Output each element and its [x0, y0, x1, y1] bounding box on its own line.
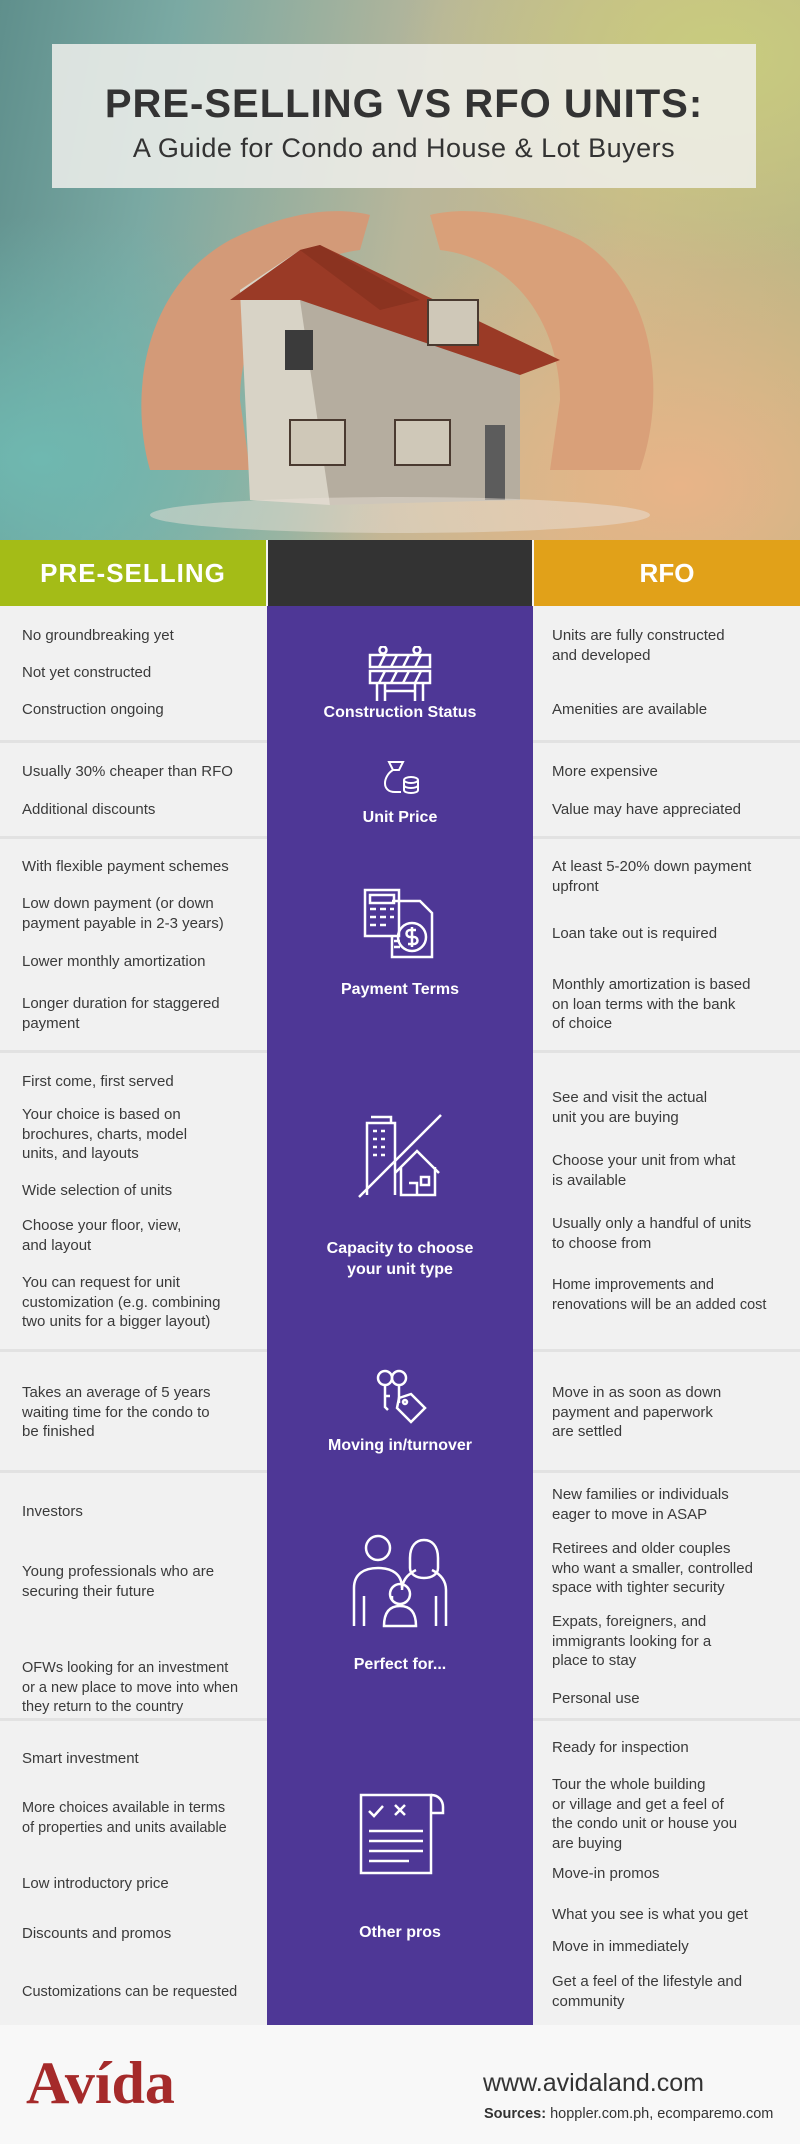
- text: Perfect for...: [354, 1656, 446, 1673]
- text: Not yet constructed: [22, 664, 151, 681]
- text: securing their future: [22, 1582, 155, 1600]
- text: on loan terms with the bank: [552, 996, 735, 1012]
- text: to choose from: [552, 1234, 651, 1252]
- row: unit price: [0, 743, 800, 839]
- text: Choose your floor, view,: [22, 1217, 181, 1234]
- text: Expats, foreigners, and: [552, 1613, 706, 1630]
- text: waiting time for the condo to: [22, 1404, 210, 1420]
- text: Amenities are available: [552, 701, 707, 718]
- text: Construction Status: [324, 704, 476, 721]
- text: space with tighter security: [552, 1579, 725, 1596]
- header: RFO: RFO: [640, 558, 694, 588]
- text: First come, first served: [22, 1073, 174, 1090]
- text: Moving in/turnover: [328, 1437, 472, 1454]
- text: Move in immediately: [552, 1938, 689, 1955]
- header photo: [0, 0, 800, 540]
- text: More expensive: [552, 763, 658, 780]
- row: payment terms: [0, 839, 800, 1053]
- text: What you see is what you get: [552, 1906, 748, 1923]
- text: eager to move in ASAP: [552, 1506, 707, 1522]
- row: construction status: [0, 606, 800, 743]
- text: OFWs looking for an investment: [22, 1660, 228, 1676]
- text: payment: [22, 1014, 80, 1032]
- text: Other pros: [359, 1924, 441, 1941]
- header: pre-selling: [0, 540, 266, 606]
- header: RFO: [534, 540, 800, 606]
- header: pre-selling: PRE-SELLING: [40, 558, 226, 588]
- text: Tour the whole building: [552, 1776, 705, 1793]
- text: community: [552, 1992, 625, 2010]
- icon: calculator and document: [364, 888, 434, 958]
- text: units, and layouts: [22, 1145, 139, 1162]
- text: Move-in promos: [552, 1865, 660, 1882]
- text: With flexible payment schemes: [22, 858, 229, 875]
- text: Longer duration for staggered: [22, 995, 220, 1012]
- footer: [0, 2025, 800, 2144]
- text: of properties and units available: [22, 1820, 227, 1836]
- text: Investors: [22, 1503, 83, 1520]
- icon: buildings: [358, 1114, 442, 1198]
- text: Smart investment: [22, 1750, 139, 1767]
- text: New families or individuals: [552, 1486, 729, 1503]
- text: payment and paperwork: [552, 1404, 713, 1420]
- row: moving in: [0, 1352, 800, 1473]
- text: Capacity to choose: [327, 1240, 473, 1257]
- text: Payment Terms: [341, 981, 459, 998]
- subtitle: A Guide for Condo and House & Lot Buyers: [133, 133, 675, 163]
- icon: money bag: [384, 761, 419, 794]
- website: www.avidaland.com: [483, 2069, 704, 2097]
- text: Usually 30% cheaper than RFO: [22, 763, 233, 780]
- text: who want a smaller, controlled: [552, 1560, 753, 1576]
- text: immigrants looking for a: [552, 1632, 711, 1650]
- title: PRE-SELLING VS RFO UNITS:: [105, 82, 703, 126]
- text: payment payable in 2-3 years): [22, 914, 224, 932]
- text: the condo unit or house you: [552, 1815, 737, 1832]
- text: or village and get a feel of: [552, 1796, 724, 1812]
- text: See and visit the actual: [552, 1089, 707, 1106]
- text: they return to the country: [22, 1699, 183, 1715]
- text: upfront: [552, 878, 599, 894]
- icon: keys with tag: [376, 1370, 427, 1424]
- text: Unit Price: [363, 809, 437, 826]
- text: Personal use: [552, 1690, 640, 1707]
- text: Home improvements and: [552, 1277, 714, 1293]
- text: is available: [552, 1172, 626, 1188]
- logo: Avida: Avída: [26, 2050, 175, 2116]
- title box: [52, 44, 756, 188]
- icon: family: [352, 1534, 448, 1628]
- text: Loan take out is required: [552, 925, 717, 942]
- icon: barricade: [368, 646, 432, 701]
- text: Choose your unit from what: [552, 1152, 735, 1169]
- row: perfect for: [0, 1473, 800, 1721]
- text: Retirees and older couples: [552, 1540, 730, 1557]
- text: Discounts and promos: [22, 1925, 171, 1942]
- column headers: [0, 540, 800, 606]
- text: Customizations can be requested: [22, 1984, 237, 2000]
- text: two units for a bigger layout): [22, 1313, 210, 1330]
- header: middle: [268, 540, 532, 606]
- text: Young professionals who are: [22, 1563, 214, 1580]
- text: Low introductory price: [22, 1875, 169, 1892]
- text: Construction ongoing: [22, 701, 164, 718]
- text: your unit type: [347, 1261, 453, 1278]
- text: Lower monthly amortization: [22, 953, 205, 970]
- text: More choices available in terms: [22, 1800, 225, 1816]
- text: No groundbreaking yet: [22, 627, 174, 644]
- text: Low down payment (or down: [22, 895, 214, 912]
- text: of choice: [552, 1015, 612, 1032]
- text: Usually only a handful of units: [552, 1215, 751, 1232]
- text: unit you are buying: [552, 1108, 679, 1126]
- row: capacity to choose: [0, 1053, 800, 1352]
- text: be finished: [22, 1423, 95, 1440]
- row: other pros: [0, 1721, 800, 2025]
- text: or a new place to move into when: [22, 1680, 238, 1696]
- text: Value may have appreciated: [552, 801, 741, 818]
- sources: Sources: hoppler.com.ph, ecomparemo.com: [484, 2106, 773, 2122]
- text: Units are fully constructed: [552, 627, 725, 644]
- icon: checklist document: [360, 1794, 444, 1874]
- text: brochures, charts, model: [22, 1126, 187, 1142]
- text: Wide selection of units: [22, 1182, 172, 1199]
- text: You can request for unit: [22, 1274, 180, 1291]
- text: are buying: [552, 1834, 622, 1852]
- text: Your choice is based on: [22, 1106, 181, 1123]
- text: Monthly amortization is based: [552, 976, 750, 993]
- text: Takes an average of 5 years: [22, 1384, 210, 1401]
- text: and layout: [22, 1236, 91, 1254]
- text: customization (e.g. combining: [22, 1294, 220, 1310]
- text: Move in as soon as down: [552, 1384, 721, 1401]
- text: renovations will be an added cost: [552, 1296, 766, 1312]
- text: are settled: [552, 1423, 622, 1440]
- text: At least 5-20% down payment: [552, 858, 751, 875]
- text: Additional discounts: [22, 801, 155, 818]
- text: place to stay: [552, 1652, 636, 1669]
- text: Get a feel of the lifestyle and: [552, 1973, 742, 1990]
- text: Ready for inspection: [552, 1739, 689, 1756]
- text: and developed: [552, 646, 650, 664]
